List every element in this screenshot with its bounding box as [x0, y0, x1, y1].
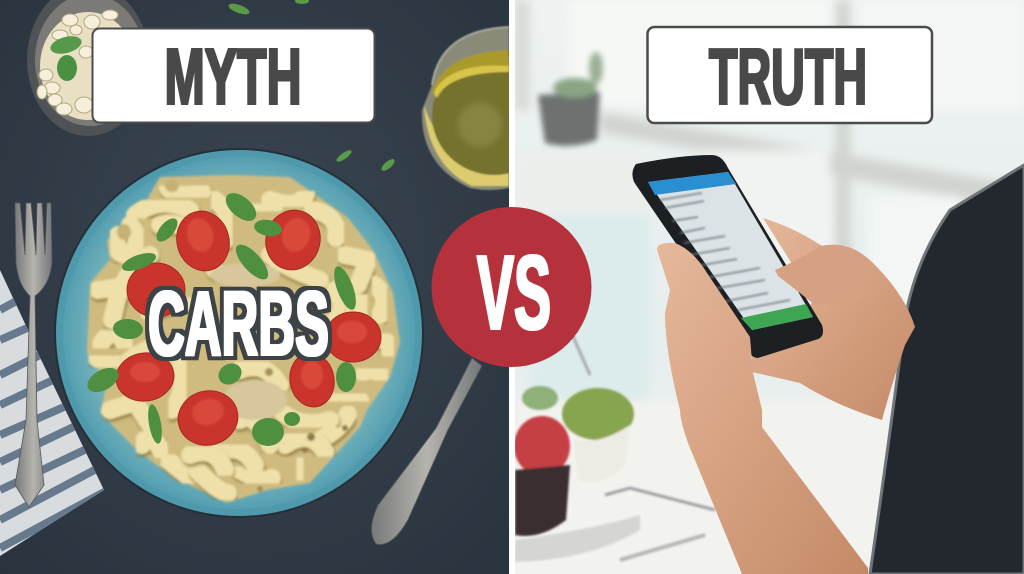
pasta — [87, 175, 400, 503]
back fingers and palm of right hand — [752, 218, 915, 420]
phone — [632, 155, 823, 358]
tomatoes — [113, 204, 381, 452]
icon: knife — [371, 358, 482, 544]
icon: bowl of beans — [27, 0, 149, 136]
left hand and forearm — [657, 243, 868, 574]
panel: myth photo of pasta — [0, 0, 556, 574]
person shirt — [870, 165, 1024, 574]
panel: truth photo of phone app — [514, 0, 1024, 574]
truth label: TRUTH — [709, 32, 867, 121]
plate — [54, 148, 424, 518]
vs badge — [432, 207, 592, 367]
basil leaves on pasta — [83, 188, 360, 446]
blurred table items — [514, 325, 715, 562]
truth label — [648, 27, 932, 123]
phone screen — [648, 172, 813, 330]
icon: striped napkin — [0, 265, 110, 560]
icon: glass of olive oil — [421, 25, 509, 191]
myth label: MYTH — [164, 32, 302, 121]
blurred potted plant — [538, 52, 603, 146]
tomato flesh highlights — [130, 215, 367, 429]
icon: fork — [15, 203, 52, 507]
window frame background — [515, 0, 1017, 414]
vs badge: VS — [477, 234, 551, 352]
icon: scattered basil leaves — [227, 0, 396, 173]
divider — [509, 0, 515, 207]
index finger over screen — [775, 244, 848, 303]
myth label — [92, 28, 374, 122]
carbs label: CARBS — [148, 273, 329, 375]
